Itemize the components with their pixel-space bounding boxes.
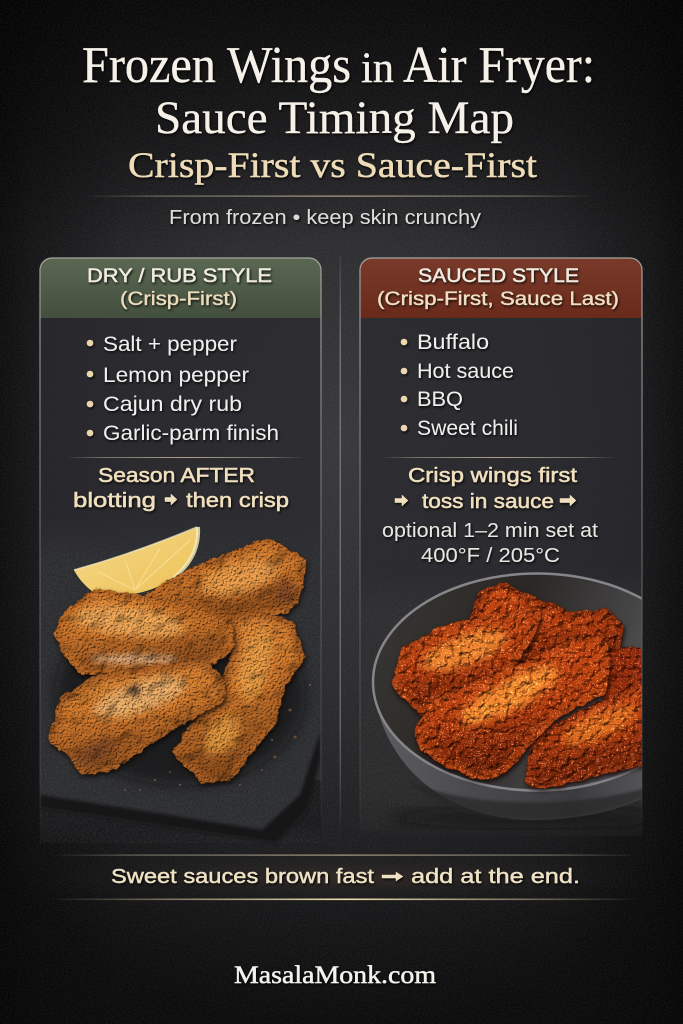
wing: top right <box>147 542 303 620</box>
header: sauced style: (Crisp-First, Sauce Last) <box>377 289 619 310</box>
header: dry / rub style: (Crisp-First) <box>120 289 237 310</box>
title: Air Fryer: <box>403 37 595 94</box>
instruction: season after blotting <box>73 464 289 512</box>
note: optional set <box>382 520 598 567</box>
wing: right front <box>524 680 642 794</box>
wing: lower right <box>177 615 302 780</box>
instruction: season after blotting: Season AFTER <box>98 464 255 487</box>
header: sauced style: SAUCED STYLE <box>418 266 579 287</box>
panel border <box>40 258 321 835</box>
brand footer: MasalaMonk.com <box>234 962 437 989</box>
list: sauces: Hot sauce <box>417 360 514 383</box>
subtitle: Crisp-First vs Sauce-First <box>128 145 537 185</box>
table surface <box>360 588 642 836</box>
header: dry / rub style <box>40 258 321 318</box>
list: dry seasonings <box>87 332 279 445</box>
wing: center <box>417 640 608 777</box>
title: in <box>361 45 394 92</box>
tagline: From frozen • keep skin crunchy <box>169 207 481 229</box>
list: sauces: BBQ <box>417 388 463 411</box>
photo: sauced wings in metal bowl <box>360 572 642 836</box>
panel background <box>360 258 642 795</box>
panel: sauced style <box>359 257 643 836</box>
panel: dry / rub style <box>40 258 321 846</box>
title: Sauce Timing Map <box>155 92 514 144</box>
callout: sweet sauces tip: add at the end. <box>411 866 580 888</box>
list: sauces <box>401 331 518 440</box>
list: dry seasonings: Cajun dry rub <box>103 392 242 416</box>
panel background <box>40 258 321 790</box>
callout: sweet sauces tip: Sweet sauces brown fast <box>111 866 375 888</box>
note: optional set: 400°F / 205°C <box>421 545 560 567</box>
list: dry seasonings: Lemon pepper <box>103 363 249 387</box>
list: sauces: Buffalo <box>417 331 489 354</box>
center divider <box>340 256 341 841</box>
title <box>82 37 595 144</box>
instruction: season after blotting: then crisp <box>186 489 289 512</box>
panel border <box>360 258 642 835</box>
header: dry / rub style: DRY / RUB STYLE <box>87 266 272 287</box>
title: Frozen Wings <box>82 37 351 94</box>
slate board <box>40 505 320 843</box>
list: sauces: Sweet chili <box>417 417 518 440</box>
callout: sweet sauces tip <box>50 854 640 900</box>
instruction: crisp then toss <box>395 464 577 513</box>
wing: middle left <box>57 592 230 672</box>
title divider <box>85 196 595 197</box>
note: optional set: optional 1–2 min set at <box>382 520 598 542</box>
bowl <box>372 572 642 820</box>
list: dry seasonings: Garlic-parm finish <box>103 421 279 445</box>
instruction: crisp then toss: Crisp wings first <box>408 464 577 487</box>
photo: dry rub wings on slate <box>40 505 321 846</box>
icon: lemon wedge <box>74 527 198 595</box>
wing: back <box>473 585 622 668</box>
rub crumbs <box>124 684 311 791</box>
instruction: crisp then toss: toss in sauce <box>422 490 554 513</box>
wing: left <box>395 610 540 713</box>
header: sauced style <box>360 258 642 318</box>
list: dry seasonings: Salt + pepper <box>103 332 237 356</box>
wing: right back <box>602 646 642 701</box>
instruction: season after blotting: blotting <box>73 489 156 512</box>
wing: lower left <box>52 663 223 772</box>
